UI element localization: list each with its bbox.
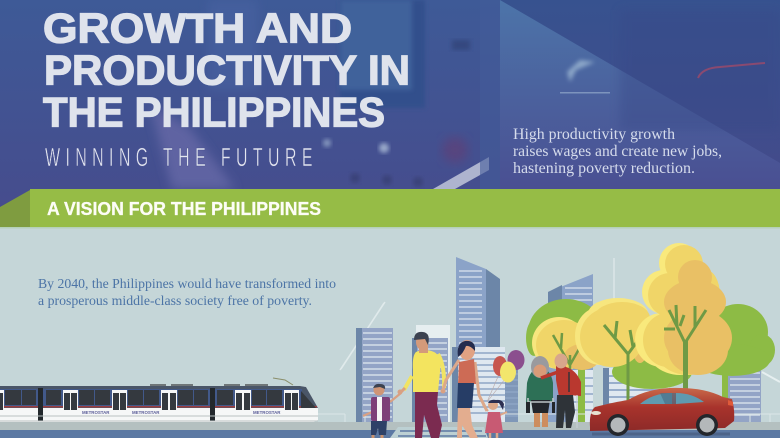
train logos [82, 410, 281, 415]
person: grandfather [541, 354, 581, 428]
tree: middle yellow [575, 298, 650, 403]
vision line 1: By 2040, the Philippines would have transformed into [38, 277, 336, 292]
train windows [5, 390, 316, 408]
title line 3: THE PHILIPPINES [43, 88, 385, 136]
panel: hero header [0, 0, 780, 212]
tree: large yellow [635, 243, 732, 400]
train [0, 378, 318, 422]
sidewalk [0, 422, 780, 430]
car [590, 388, 734, 436]
tree: green background trees [526, 299, 775, 422]
building: middle block [412, 325, 450, 422]
banner heading: A VISION FOR THE PHILIPPINES [47, 198, 321, 219]
train body [0, 386, 318, 422]
banner fold [0, 190, 30, 227]
hero background [0, 0, 780, 212]
building: wide block [452, 347, 518, 422]
person: boy [363, 384, 401, 438]
title line 1: GROWTH AND [43, 4, 352, 52]
intro line 2: raises wages and create new jobs, [513, 143, 722, 160]
person: grandmother [526, 356, 555, 427]
person: father [398, 332, 446, 438]
road [0, 430, 780, 438]
fence [0, 414, 780, 422]
intro line 3: hastening poverty reduction. [513, 160, 695, 177]
intro text [513, 126, 722, 177]
title [43, 4, 410, 136]
building: tall tower [456, 257, 500, 350]
scene background [0, 227, 780, 438]
photo: control panel [150, 0, 489, 189]
pantograph [273, 378, 293, 385]
subtitle: WINNING THE FUTURE [45, 142, 313, 172]
car rear wheel [696, 414, 718, 436]
person: girl [483, 400, 507, 438]
building: left block [356, 328, 393, 422]
building: behind trees left [548, 274, 593, 422]
vision line 2: a prosperous middle-class society free of poverty. [38, 294, 312, 309]
building: centre behind trees [603, 368, 669, 422]
logo 3: METROSTAR [253, 410, 281, 415]
balloons [487, 350, 524, 402]
building: right block [727, 368, 761, 422]
panel: vision scene [0, 227, 780, 438]
train doors [0, 390, 299, 421]
logo 1: METROSTAR [82, 410, 110, 415]
title line 2: PRODUCTIVITY IN [44, 46, 410, 94]
intro line 1: High productivity growth [513, 126, 675, 143]
tree: left yellow [532, 317, 600, 422]
train roof equipment [150, 384, 268, 386]
car front wheel [607, 414, 629, 436]
train upper band [0, 386, 318, 408]
panel: green section banner [0, 189, 780, 228]
banner bar [30, 189, 780, 227]
logo 2: METROSTAR [132, 410, 160, 415]
person: mother [443, 340, 487, 438]
vision text [38, 277, 336, 309]
photo: right diagonal panel [480, 0, 780, 190]
train couplings [38, 388, 215, 421]
crosswalk [390, 427, 488, 438]
